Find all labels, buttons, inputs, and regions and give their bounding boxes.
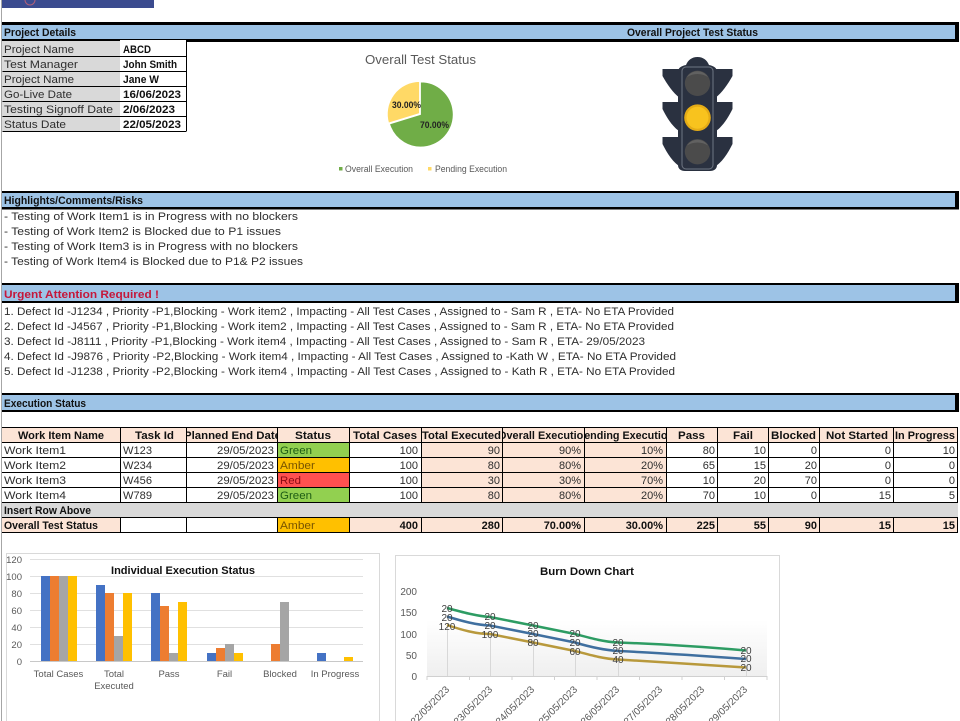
row: work item 4: 100 (400, 490, 418, 502)
table header row: Total Cases (353, 430, 417, 442)
section bar: project details and overall status (2, 22, 959, 42)
data labels: 20 (527, 629, 539, 640)
table header row: Status (295, 430, 331, 442)
data labels: 20 (527, 621, 539, 632)
row: work item 3: 30 (488, 475, 500, 487)
data labels (439, 604, 752, 674)
section bar: execution status: Execution Status (4, 398, 86, 410)
highlights text block: - Testing of Work Item2 is Blocked due to P1 issues (4, 226, 282, 238)
category labels: Executed (94, 681, 134, 692)
y axis labels: 50 (406, 651, 417, 662)
row: work item 3: 29/05/2023 (217, 475, 274, 487)
blue burn down line (447, 616, 746, 659)
urgent defects list (4, 306, 676, 378)
row: work item 4: 70 (703, 490, 715, 502)
table header row: Task Id (135, 430, 174, 442)
highlights text block: - Testing of Work Item3 is in Progress with no blockers (4, 241, 299, 253)
row: work item 1: 10 (754, 445, 766, 457)
orange series bars (50, 576, 280, 661)
project details table: 2/06/2023 (123, 104, 175, 116)
project details table: Testing Signoff Date (4, 104, 113, 116)
row: work item 2: Work Item2 (4, 460, 66, 472)
yellow series bars (68, 576, 353, 661)
project details table (2, 40, 187, 132)
data labels: 20 (740, 654, 752, 665)
data labels: 60 (569, 647, 581, 658)
urgent defects list: 4. Defect Id -J9876 , Priority -P2,Blocking - Work item4 , Impacting - All Test Cases , Assigned to -Kath W , ETA- No ETA Provided (4, 351, 676, 363)
row: work item 3: 20 (754, 475, 766, 487)
row: overall test status totals: 280 (482, 520, 500, 532)
section bar: highlights, comments and risks: Highlights/Comments/Risks (4, 195, 143, 207)
data labels: 40 (612, 655, 624, 666)
data labels: 80 (527, 638, 539, 649)
row: overall test status totals: Overall Test Status (4, 520, 98, 532)
row: work item 4: Work Item4 (4, 490, 66, 502)
top logo banner (2, 0, 154, 8)
data labels: 20 (740, 646, 752, 657)
row: work item 3: W456 (123, 475, 152, 487)
urgent defects list: 1. Defect Id -J1234 , Priority -P1,Blocking - Work item2 , Impacting - All Test Cases , Assigned to - Sam R , ETA- No ETA Provided (4, 306, 674, 318)
row: work item 2: 29/05/2023 (217, 460, 274, 472)
project details table: ABCD (123, 44, 151, 56)
row: work item 2: 20 (805, 460, 817, 472)
pie chart: overall test status: 70.00% (420, 120, 449, 130)
y axis labels (400, 587, 417, 683)
data labels: 20 (569, 638, 581, 649)
y axis labels: 100 (6, 572, 22, 583)
category labels: Total Cases (34, 669, 84, 680)
project details table: 22/05/2023 (123, 119, 181, 131)
table header row: Pending Execution (577, 430, 674, 442)
row: work item 1: Green (280, 445, 312, 457)
execution status table (2, 427, 958, 532)
row: work item 4: Green (280, 490, 312, 502)
section bar: urgent attention required: Urgent Attention Required ! (4, 289, 159, 301)
pie chart: overall test status: Overall Test Status (365, 52, 476, 67)
data labels: 120 (439, 622, 456, 633)
y axis labels: 0 (411, 672, 417, 683)
highlights text block: - Testing of Work Item1 is in Progress with no blockers (4, 211, 299, 223)
bar chart: individual execution status: Individual Execution Status (111, 565, 255, 577)
data labels: 20 (484, 621, 496, 632)
line chart: burn down chart (396, 556, 780, 721)
y axis labels: 120 (6, 555, 22, 566)
row: work item 3: 70 (805, 475, 817, 487)
row: work item 4 (4, 490, 955, 502)
row: overall test status totals: Amber (280, 520, 315, 532)
row: work item 2: 65 (703, 460, 715, 472)
row: work item 2: W234 (123, 460, 152, 472)
data labels: 20 (484, 612, 496, 623)
row: work item 3: 30% (559, 475, 581, 487)
y axis labels: 100 (400, 630, 417, 641)
project details table: 16/06/2023 (123, 89, 181, 101)
section bar: project details and overall status: Project Details (4, 27, 76, 39)
row: work item 1: W123 (123, 445, 152, 457)
green burn down line (447, 608, 746, 650)
row: work item 1: Work Item1 (4, 445, 66, 457)
row: work item 4: 15 (879, 490, 891, 502)
category labels: Pass (158, 669, 180, 680)
data labels: 20 (612, 646, 624, 657)
table header row: In Progress (895, 430, 955, 442)
row: work item 1: 80 (703, 445, 715, 457)
data labels: 20 (740, 663, 752, 674)
row: work item 2: 80 (488, 460, 500, 472)
row: work item 4: 20% (641, 490, 663, 502)
row: work item 2: Amber (280, 460, 315, 472)
row: work item 1: 10 (943, 445, 955, 457)
project details table: Project Name (4, 44, 74, 56)
table header row (18, 430, 955, 442)
row: work item 1: 90% (559, 445, 581, 457)
grey series bars (59, 576, 289, 661)
category labels: In Progress (311, 669, 360, 680)
date axis labels (409, 684, 750, 721)
line chart: burn down chart: Burn Down Chart (540, 566, 634, 578)
data labels: 20 (441, 604, 453, 615)
category labels: Blocked (263, 669, 297, 680)
y axis labels: 150 (400, 608, 417, 619)
project details table: John Smith (123, 59, 177, 71)
bar chart: individual execution status (6, 554, 380, 721)
row: work item 1: 100 (400, 445, 418, 457)
data labels: 20 (612, 638, 624, 649)
row: work item 4: 0 (811, 490, 817, 502)
row: work item 3: 70% (641, 475, 663, 487)
highlights text block (4, 211, 304, 268)
urgent defects list: 3. Defect Id -J8111 , Priority -P1,Blocking - Work item4 , Impacting - All Test Cases , Assigned to - Sam R , ETA- 29/05/2023 (4, 336, 645, 348)
row: work item 2: 100 (400, 460, 418, 472)
section bar: execution status (2, 393, 959, 412)
y axis labels: 200 (400, 587, 417, 598)
row: overall test status totals: 70.00% (544, 520, 581, 532)
project details table: Jane W (123, 74, 160, 86)
table header row: Total Executed (422, 430, 501, 442)
row: work item 3: 10 (703, 475, 715, 487)
yellow burn down line (447, 625, 746, 668)
row: work item 4: 80 (488, 490, 500, 502)
row: overall test status totals: 225 (697, 520, 715, 532)
row: overall test status totals: 15 (943, 520, 955, 532)
pie chart: overall test status: Overall Execution (345, 164, 413, 174)
table header row: Not Started (826, 430, 888, 442)
table header row: Work Item Name (18, 430, 104, 442)
y axis labels (6, 555, 22, 668)
row: work item 2: 80% (559, 460, 581, 472)
row: work item 2 (4, 460, 955, 472)
table header row: Fail (733, 430, 753, 442)
row: overall test status totals (4, 520, 955, 532)
row: work item 3 (4, 475, 955, 487)
row: work item 3: 0 (885, 475, 891, 487)
y axis labels: 60 (11, 606, 22, 617)
data labels: 20 (441, 613, 453, 624)
row: work item 1: 10% (641, 445, 663, 457)
section bar: urgent attention required (2, 283, 959, 303)
category labels: Fail (217, 669, 232, 680)
blue series bars (41, 576, 326, 661)
pie chart: overall test status: 30.00% (392, 100, 421, 110)
row: work item 4: 10 (754, 490, 766, 502)
row: work item 3: 100 (400, 475, 418, 487)
row: work item 2: 0 (885, 460, 891, 472)
table header row: Overall Execution (498, 430, 590, 442)
y axis labels: 0 (17, 657, 22, 668)
highlights text block: - Testing of Work Item4 is Blocked due to P1& P2 issues (4, 256, 304, 268)
row: work item 3: Work Item3 (4, 475, 66, 487)
row: work item 1: 90 (488, 445, 500, 457)
row: overall test status totals: 15 (879, 520, 891, 532)
row: work item 1: 29/05/2023 (217, 445, 274, 457)
project details table: Go-Live Date (4, 89, 72, 101)
y axis labels: 80 (11, 589, 22, 600)
row: work item 3: Red (280, 475, 301, 487)
row: work item 1: 0 (811, 445, 817, 457)
urgent defects list: 2. Defect Id -J4567 , Priority -P1,Blocking - Work item2 , Impacting - All Test Cases , Assigned to - Sam R , ETA- No ETA Provided (4, 321, 674, 333)
data labels: 100 (482, 630, 499, 641)
data labels: 20 (569, 629, 581, 640)
project details table: Project Name (4, 74, 74, 86)
y axis labels: 20 (11, 640, 22, 651)
row: insert row above: Insert Row Above (4, 505, 91, 517)
pie chart: overall test status: Pending Execution (435, 164, 507, 174)
icon: traffic light with amber lit (662, 57, 732, 171)
row: work item 2: 20% (641, 460, 663, 472)
project details table: Test Manager (4, 59, 78, 71)
row: work item 4: 80% (559, 490, 581, 502)
table header row: Pass (678, 430, 705, 442)
row: work item 4: W789 (123, 490, 152, 502)
row: work item 4: 5 (949, 490, 955, 502)
row: overall test status totals: 400 (400, 520, 418, 532)
row: overall test status totals: 90 (805, 520, 817, 532)
project details table: Status Date (4, 119, 66, 131)
category labels: Total (104, 669, 124, 680)
row: work item 4: 29/05/2023 (217, 490, 274, 502)
y axis labels: 40 (11, 623, 22, 634)
row: overall test status totals: 55 (754, 520, 766, 532)
category labels (34, 669, 360, 692)
pie chart: overall test status (339, 52, 507, 174)
row: overall test status totals: 30.00% (626, 520, 663, 532)
section bar: highlights, comments and risks (2, 191, 959, 210)
urgent defects list: 5. Defect Id -J1238 , Priority -P2,Blocking - Work item4 , Impacting - All Test Cases , Assigned to - Kath R , ETA- No ETA Provided (4, 366, 675, 378)
row: work item 2: 0 (949, 460, 955, 472)
table header row: Blocked (771, 430, 816, 442)
row: work item 1: 0 (885, 445, 891, 457)
section bar: project details and overall status: Overall Project Test Status (627, 27, 758, 39)
row: work item 1 (4, 445, 955, 457)
row: work item 3: 0 (949, 475, 955, 487)
table header row: Planned End Date (184, 430, 281, 442)
row: work item 2: 15 (754, 460, 766, 472)
